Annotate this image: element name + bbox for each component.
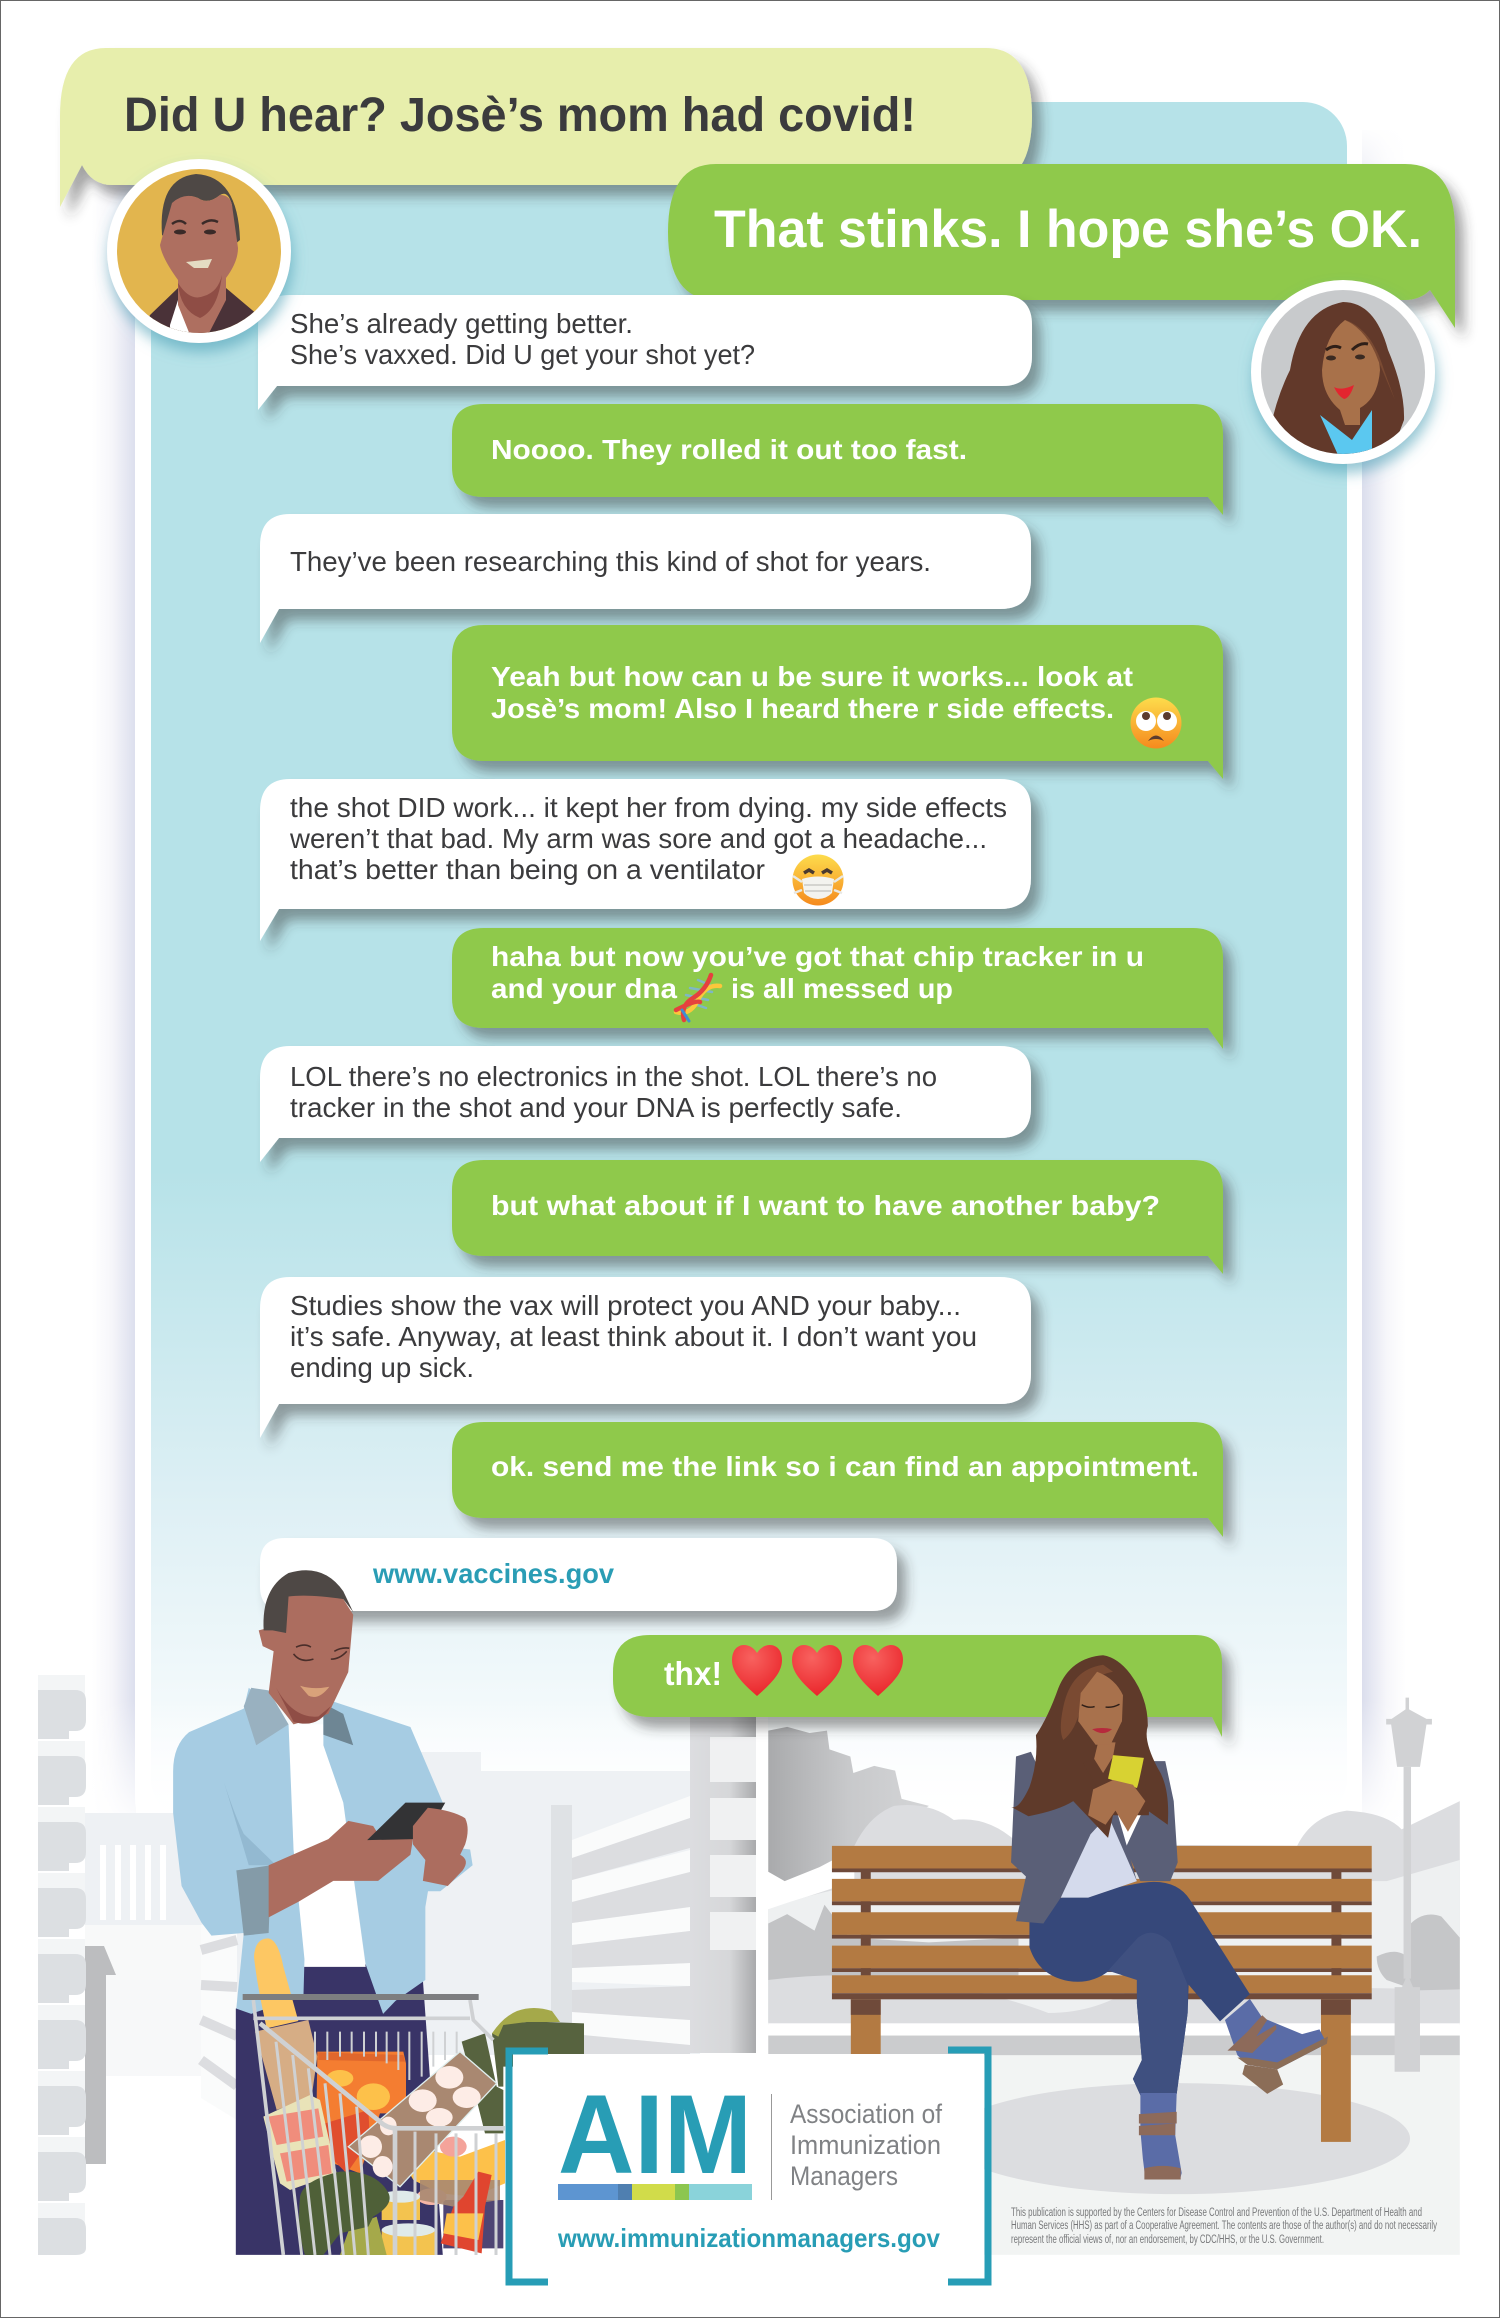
- bubble: vaccines.gov link: [260, 1538, 897, 1611]
- bubble: send me the link: [452, 1422, 1223, 1537]
- bubble: She's already: [258, 295, 1032, 410]
- icon: dna emoji: [676, 975, 720, 1021]
- message text: Noooo. They rolled it out too fast.: [491, 434, 967, 465]
- icon: three hearts: [732, 1645, 903, 1696]
- link text: www.vaccines.gov: [372, 1558, 614, 1589]
- white stair railings: [572, 1796, 690, 2045]
- background scene: right park: [768, 1727, 1460, 2255]
- right teal bracket: [948, 2050, 988, 2282]
- message text: ok. send me the link so i can find an appointment.: [491, 1451, 1199, 1482]
- icon: face with mask emoji: [792, 854, 844, 906]
- message text: but what about if I want to have another baby?: [491, 1190, 1160, 1221]
- message text: She’s already getting better.: [290, 308, 633, 339]
- organisation name: Immunization: [790, 2130, 941, 2160]
- message text: haha but now you’ve got that chip tracker in u: [491, 941, 1144, 972]
- illustration: shopping cart with groceries: [243, 1938, 584, 2255]
- message text: They’ve been researching this kind of shot for years.: [290, 546, 931, 577]
- bubble: Noooo: [452, 404, 1223, 515]
- message text: is all messed up: [731, 973, 953, 1004]
- central tower: [690, 1717, 756, 2053]
- message text: LOL there’s no electronics in the shot. LOL there’s no: [290, 1061, 937, 1092]
- message text: Studies show the vax will protect you AND your baby...: [290, 1290, 961, 1321]
- message text: She’s vaxxed. Did U get your shot yet?: [290, 339, 755, 370]
- lamp post: [1386, 1698, 1432, 2072]
- bubble: researching: [260, 514, 1031, 643]
- avatar: man: [107, 159, 291, 343]
- bubble text: Did U hear? Josè’s mom had covid!: [124, 89, 916, 142]
- bubble: haha chip tracker: [452, 928, 1223, 1049]
- message text: the shot DID work... it kept her from dying. my side effects: [290, 792, 1007, 823]
- message text: Josè’s mom! Also I heard there r side effects.: [491, 693, 1114, 724]
- background scene: left city: [38, 1675, 768, 2255]
- message text: thx!: [664, 1655, 722, 1692]
- logo panel: [509, 2050, 988, 2284]
- avatar: woman: [1251, 280, 1435, 470]
- bubble: another baby: [452, 1160, 1223, 1274]
- message text: ending up sick.: [290, 1352, 474, 1383]
- funding disclaimer: represent the official views of, nor an endorsement, by CDC/HHS, or the U.S. Government.: [1011, 2234, 1324, 2246]
- message text: it’s safe. Anyway, at least think about it. I don’t want you: [290, 1321, 977, 1352]
- message text: and your dna: [491, 973, 677, 1004]
- left teal bracket: [509, 2051, 548, 2282]
- bubble: That stinks: [668, 164, 1455, 328]
- bubble: Did U hear: [60, 48, 1032, 207]
- icon: eye-roll emoji: [1130, 698, 1182, 748]
- illustration: man with phone: [173, 1570, 473, 2255]
- bench: [832, 1846, 1372, 2142]
- bubble: LOL no electronics: [260, 1046, 1031, 1162]
- bubble: Studies show: [260, 1277, 1031, 1438]
- message text: that’s better than being on a ventilator: [290, 854, 765, 885]
- bubble: how can u be sure: [452, 625, 1223, 779]
- bubble text: That stinks. I hope she’s OK.: [714, 200, 1422, 259]
- message text: Yeah but how can u be sure it works... look at: [491, 661, 1133, 692]
- bubble: the shot DID work: [260, 779, 1031, 941]
- message text: tracker in the shot and your DNA is perfectly safe.: [290, 1092, 902, 1123]
- bubble: thx: [613, 1635, 1222, 1737]
- stacked column: [38, 1675, 86, 2255]
- organisation name: Managers: [790, 2161, 898, 2191]
- phone panel background: [90, 85, 1410, 1845]
- illustration: woman on bench with phone: [1011, 1655, 1328, 2180]
- logo colour bar: [558, 2184, 752, 2200]
- message text: weren’t that bad. My arm was sore and got a headache...: [289, 823, 987, 854]
- organisation name: Association of: [790, 2099, 942, 2129]
- AIM wordmark: AIM: [558, 2072, 752, 2197]
- website url: www.immunizationmanagers.gov: [557, 2223, 940, 2253]
